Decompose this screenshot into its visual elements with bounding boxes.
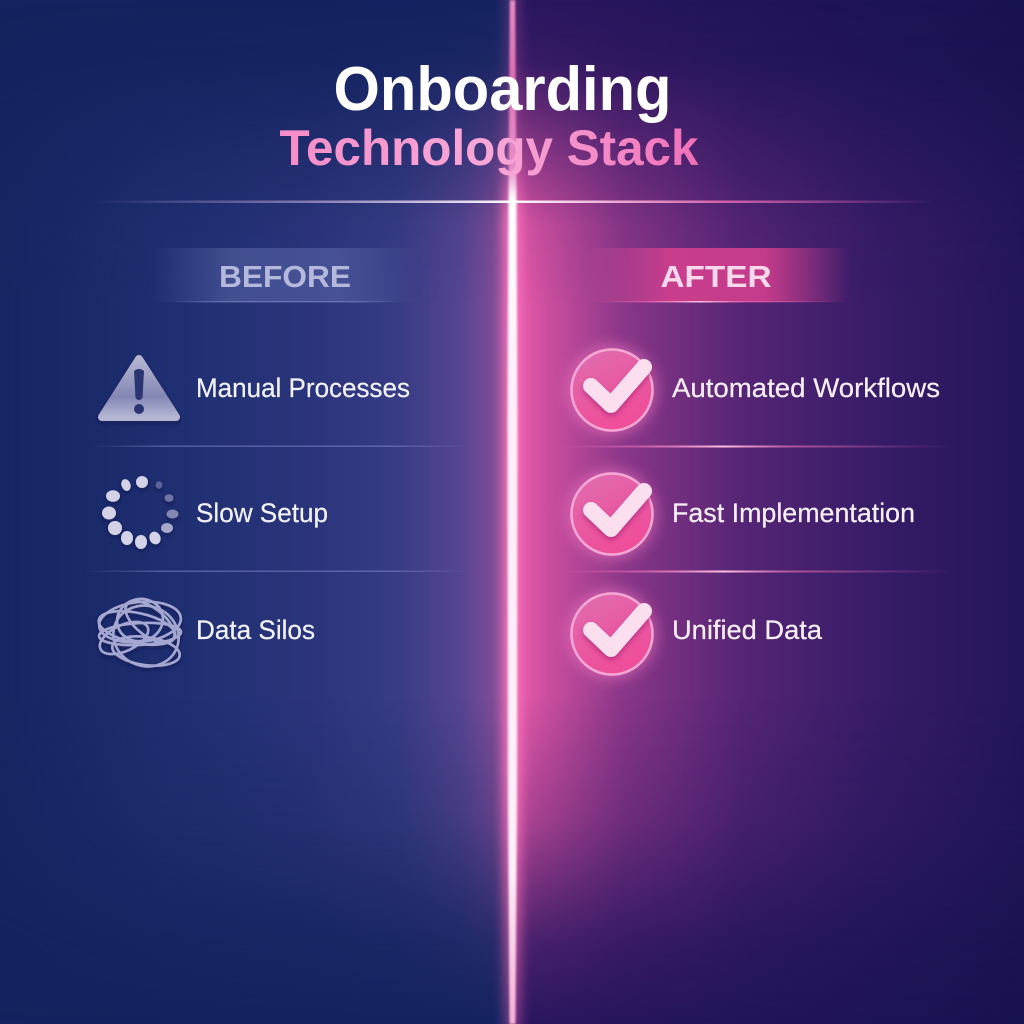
title [280,55,699,176]
panel: before header [150,248,420,302]
label: data silos: Data Silos [196,615,315,645]
central glowing divider [503,0,522,1024]
panel: after list [567,345,940,679]
icon: loading spinner [102,476,178,549]
label: unified data: Unified Data [672,615,823,645]
title: Technology Stack [280,120,699,176]
background: left glow [54,52,510,989]
icon: tangled data loops [95,593,187,675]
label: automated workflows: Automated Workflows [672,373,940,403]
horizontal title rule [90,200,934,203]
panel: after header [585,248,850,302]
label: manual processes: Manual Processes [196,373,410,403]
icon: check badge 3 [567,589,657,679]
background: right glow [512,0,1024,1024]
label: fast implementation: Fast Implementation [672,498,915,528]
background: right after half [512,0,1024,1024]
title: Onboarding [334,55,672,124]
icon: check badge 2 [567,469,657,559]
panel: after header: AFTER [660,259,772,294]
icon: warning triangle [102,359,176,417]
panel: before list [95,359,410,675]
panel: before header: BEFORE [219,259,351,294]
background: left before half [0,0,512,1024]
label: slow setup: Slow Setup [196,498,328,528]
icon: check badge 1 [567,345,657,435]
